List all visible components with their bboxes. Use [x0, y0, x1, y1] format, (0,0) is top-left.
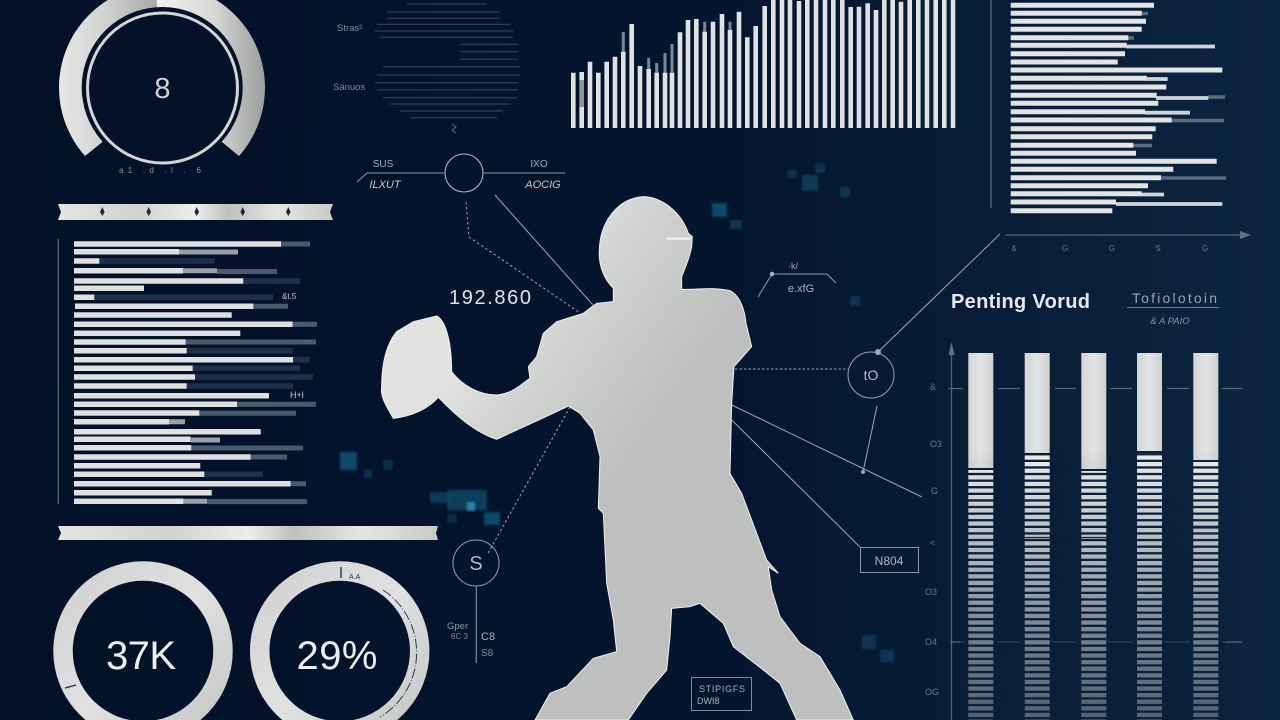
sub heading text: Tofiolotoin — [1132, 290, 1217, 306]
column chart axis — [950, 348, 952, 720]
column axis arrow — [948, 342, 954, 355]
lower label four: S8 — [481, 648, 494, 659]
lower dot — [861, 470, 865, 474]
section heading: Penting Vorud — [951, 291, 1090, 313]
column axis labels — [925, 382, 942, 697]
right circle outline — [848, 352, 894, 398]
gauge value: 8 — [154, 73, 171, 105]
top column chart — [573, 0, 953, 128]
left chart small label two: H+l — [290, 390, 304, 400]
donut ring 37K — [63, 571, 223, 720]
donut tick label: A.A — [349, 574, 361, 581]
column 3 — [1081, 353, 1106, 720]
gauge: score dial — [59, 0, 265, 175]
donut tick 37K — [65, 685, 76, 688]
node rails — [357, 173, 565, 182]
silhouette body — [381, 197, 853, 720]
node circle — [445, 154, 483, 192]
donut tick 29% — [340, 567, 342, 578]
callout: upper right of player — [758, 261, 836, 297]
donut ring 29% — [260, 571, 420, 720]
node: lower left circle — [447, 540, 499, 663]
ribbon band — [58, 204, 333, 220]
faint column peaks — [623, 22, 730, 73]
left bright bars — [74, 244, 293, 501]
node left label bottom: ILXUT — [369, 179, 402, 191]
connector lines — [466, 195, 1000, 555]
right bright bars — [1011, 5, 1222, 211]
right dim extensions — [1128, 14, 1226, 178]
left chart axis — [57, 239, 59, 504]
bottom box first line: STIPIGFS — [699, 684, 745, 694]
right chart axis — [990, 0, 992, 208]
right light extensions — [1116, 46, 1222, 204]
column fade overlay — [960, 450, 1225, 720]
gauge outer arc — [59, 0, 265, 156]
ribbon: upper with markers — [58, 204, 333, 220]
left chart small labels: &t.5 — [282, 292, 297, 301]
bottom box frame — [692, 678, 752, 710]
right chart tick labels: G — [1109, 244, 1115, 253]
node right label bottom: AOCIG — [524, 179, 561, 191]
lower circle outline — [453, 540, 499, 586]
column axis labels: < — [930, 538, 935, 548]
column axis labels: O3 — [925, 587, 937, 597]
decorative data squares — [340, 163, 894, 662]
left faint bar extensions — [94, 261, 313, 474]
N804 frame — [860, 548, 918, 572]
stacked column chart: bottom right — [925, 342, 1242, 720]
callout leader — [758, 274, 836, 297]
ribbon markers — [100, 204, 291, 220]
bottom box second line: DWI8 — [697, 696, 720, 706]
column axis labels: G — [931, 486, 938, 496]
sub heading — [1127, 290, 1219, 327]
right chart tick labels: G — [1202, 244, 1208, 253]
callout top label: ·k/ — [788, 261, 798, 271]
globe lines — [375, 4, 520, 118]
donut value 37K: 37K — [106, 634, 176, 678]
donut: 37K — [63, 571, 223, 720]
right circle dot — [875, 349, 881, 355]
horizontal bar chart: top right — [991, 0, 1251, 253]
measurement value: 192.860 — [449, 287, 531, 309]
left mid bar extensions — [186, 244, 317, 502]
column 4 — [1137, 353, 1162, 720]
lower circle stem — [475, 586, 477, 663]
lower label two: 6C 3 — [451, 632, 468, 641]
horizontal bar chart: left — [58, 239, 317, 504]
column 5 — [1193, 353, 1218, 720]
right chart tick labels: S — [1155, 244, 1161, 253]
globe label two: Sanuos — [333, 82, 365, 93]
column 2 — [1025, 353, 1050, 720]
right chart x axis — [1005, 234, 1243, 236]
label box: bottom centre — [692, 678, 752, 710]
right chart axis arrow — [1240, 231, 1251, 239]
top connector node — [357, 154, 565, 192]
lower label three: C8 — [481, 631, 495, 643]
right chart tick labels: & — [1011, 244, 1017, 253]
helmet face mask highlight — [667, 236, 691, 242]
node left label top: SUS — [373, 159, 394, 170]
donut: 29% — [260, 567, 420, 720]
sub heading caption: & A PAIO — [1150, 316, 1190, 327]
right chart tick labels — [1011, 244, 1208, 253]
column axis labels: O4 — [925, 637, 937, 647]
node: right circle — [848, 349, 894, 474]
callout dot — [770, 272, 774, 276]
node right label top: IXO — [530, 159, 548, 170]
callout bottom label: e.xfG — [788, 283, 814, 295]
sub heading rule — [1127, 306, 1219, 308]
lower label one: Gper — [447, 621, 468, 632]
column axis labels: & — [930, 382, 936, 392]
striped globe chart — [333, 4, 520, 133]
gauge inner ring — [88, 13, 238, 163]
donut inner arc 29% — [380, 590, 417, 717]
globe stem — [452, 124, 456, 133]
columns — [573, 0, 953, 128]
column dark dividers — [1025, 528, 1218, 538]
ribbon: lower — [58, 526, 438, 540]
label box: N804 — [860, 548, 918, 572]
column axis labels: O3 — [930, 439, 942, 449]
player silhouette with football — [381, 197, 853, 720]
right chart tick labels: G — [1062, 244, 1068, 253]
gauge scale labels: a1 .d .l . 6 — [119, 166, 202, 175]
globe label one: Stras² — [337, 23, 362, 34]
right circle text: tO — [864, 367, 878, 383]
donut value 29%: 29% — [296, 634, 378, 678]
column axis labels: OG — [925, 687, 939, 697]
N804 text: N804 — [875, 554, 904, 568]
column reference dashes — [948, 388, 1242, 642]
column 1 — [968, 353, 993, 720]
left light bar extensions — [169, 252, 238, 501]
column shaded segment — [579, 80, 584, 107]
lower circle glyph: S — [469, 553, 483, 575]
